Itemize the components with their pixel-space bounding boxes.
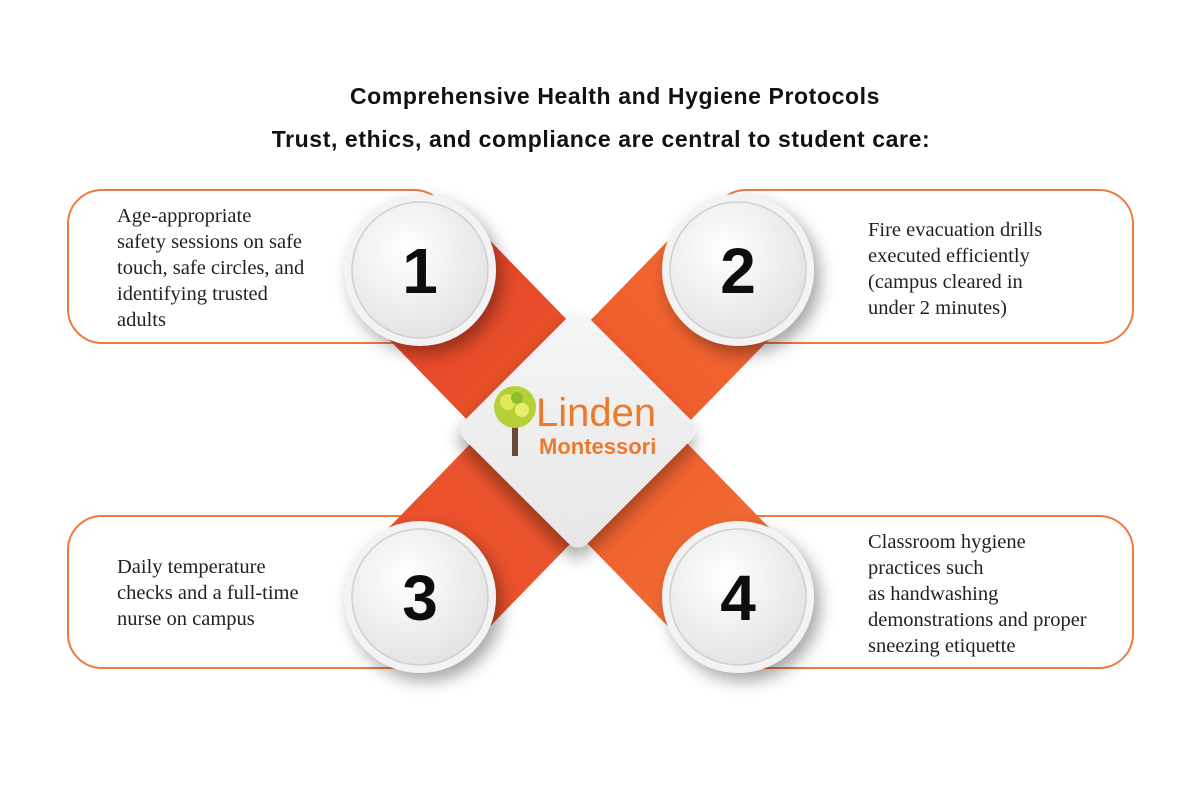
circle 2: 2 [720,235,756,307]
circle 3: 3 [402,562,438,634]
circle 4: 4 [720,562,756,634]
band: diagonal 2 to 3 [370,220,788,647]
panel: item 2 box: Fire evacuation drills [868,219,1042,241]
panel: item 3 box: Daily temperature [117,556,266,578]
center diamond with logo: Montessori [539,434,656,459]
panel: item 4 box: demonstrations and proper [868,609,1087,631]
circle 1: 1 [402,235,438,307]
circle 2 [662,194,814,346]
panel: item 4 box: as handwashing [868,583,998,605]
title: Trust, ethics, and compliance are central to student care: [272,126,930,152]
panel: item 3 box: nurse on campus [117,608,255,630]
band: diagonal 1 to 4 [370,220,788,647]
panel: item 2 box: (campus cleared in [868,271,1023,293]
circle 4 [662,521,814,673]
panel: item 4 box [712,516,1133,668]
title [272,83,930,152]
icon: tree logo [494,386,536,456]
circle 1 [344,194,496,346]
panel: item 1 box: Age-appropriate [117,205,251,227]
panel: item 4 box: sneezing etiquette [868,635,1015,657]
center diamond with logo: Linden [536,391,656,435]
panel: item 2 box: executed efficiently [868,245,1031,267]
panel: item 4 box: practices such [868,557,984,579]
circle 3 [344,521,496,673]
panel: item 1 box [68,190,448,343]
title: Comprehensive Health and Hygiene Protocols [350,83,880,109]
panel: item 2 box: under 2 minutes) [868,297,1007,319]
panel: item 1 box: safety sessions on safe [117,231,302,253]
panel: item 1 box: touch, safe circles, and [117,257,304,279]
panel: item 4 box: Classroom hygiene [868,531,1026,553]
panel: item 1 box: identifying trusted [117,283,268,305]
panel: item 3 box [68,516,448,668]
center diamond with logo [455,307,701,553]
panel: item 1 box: adults [117,309,166,331]
panel: item 3 box: checks and a full-time [117,582,299,604]
panel: item 2 box [712,190,1133,343]
